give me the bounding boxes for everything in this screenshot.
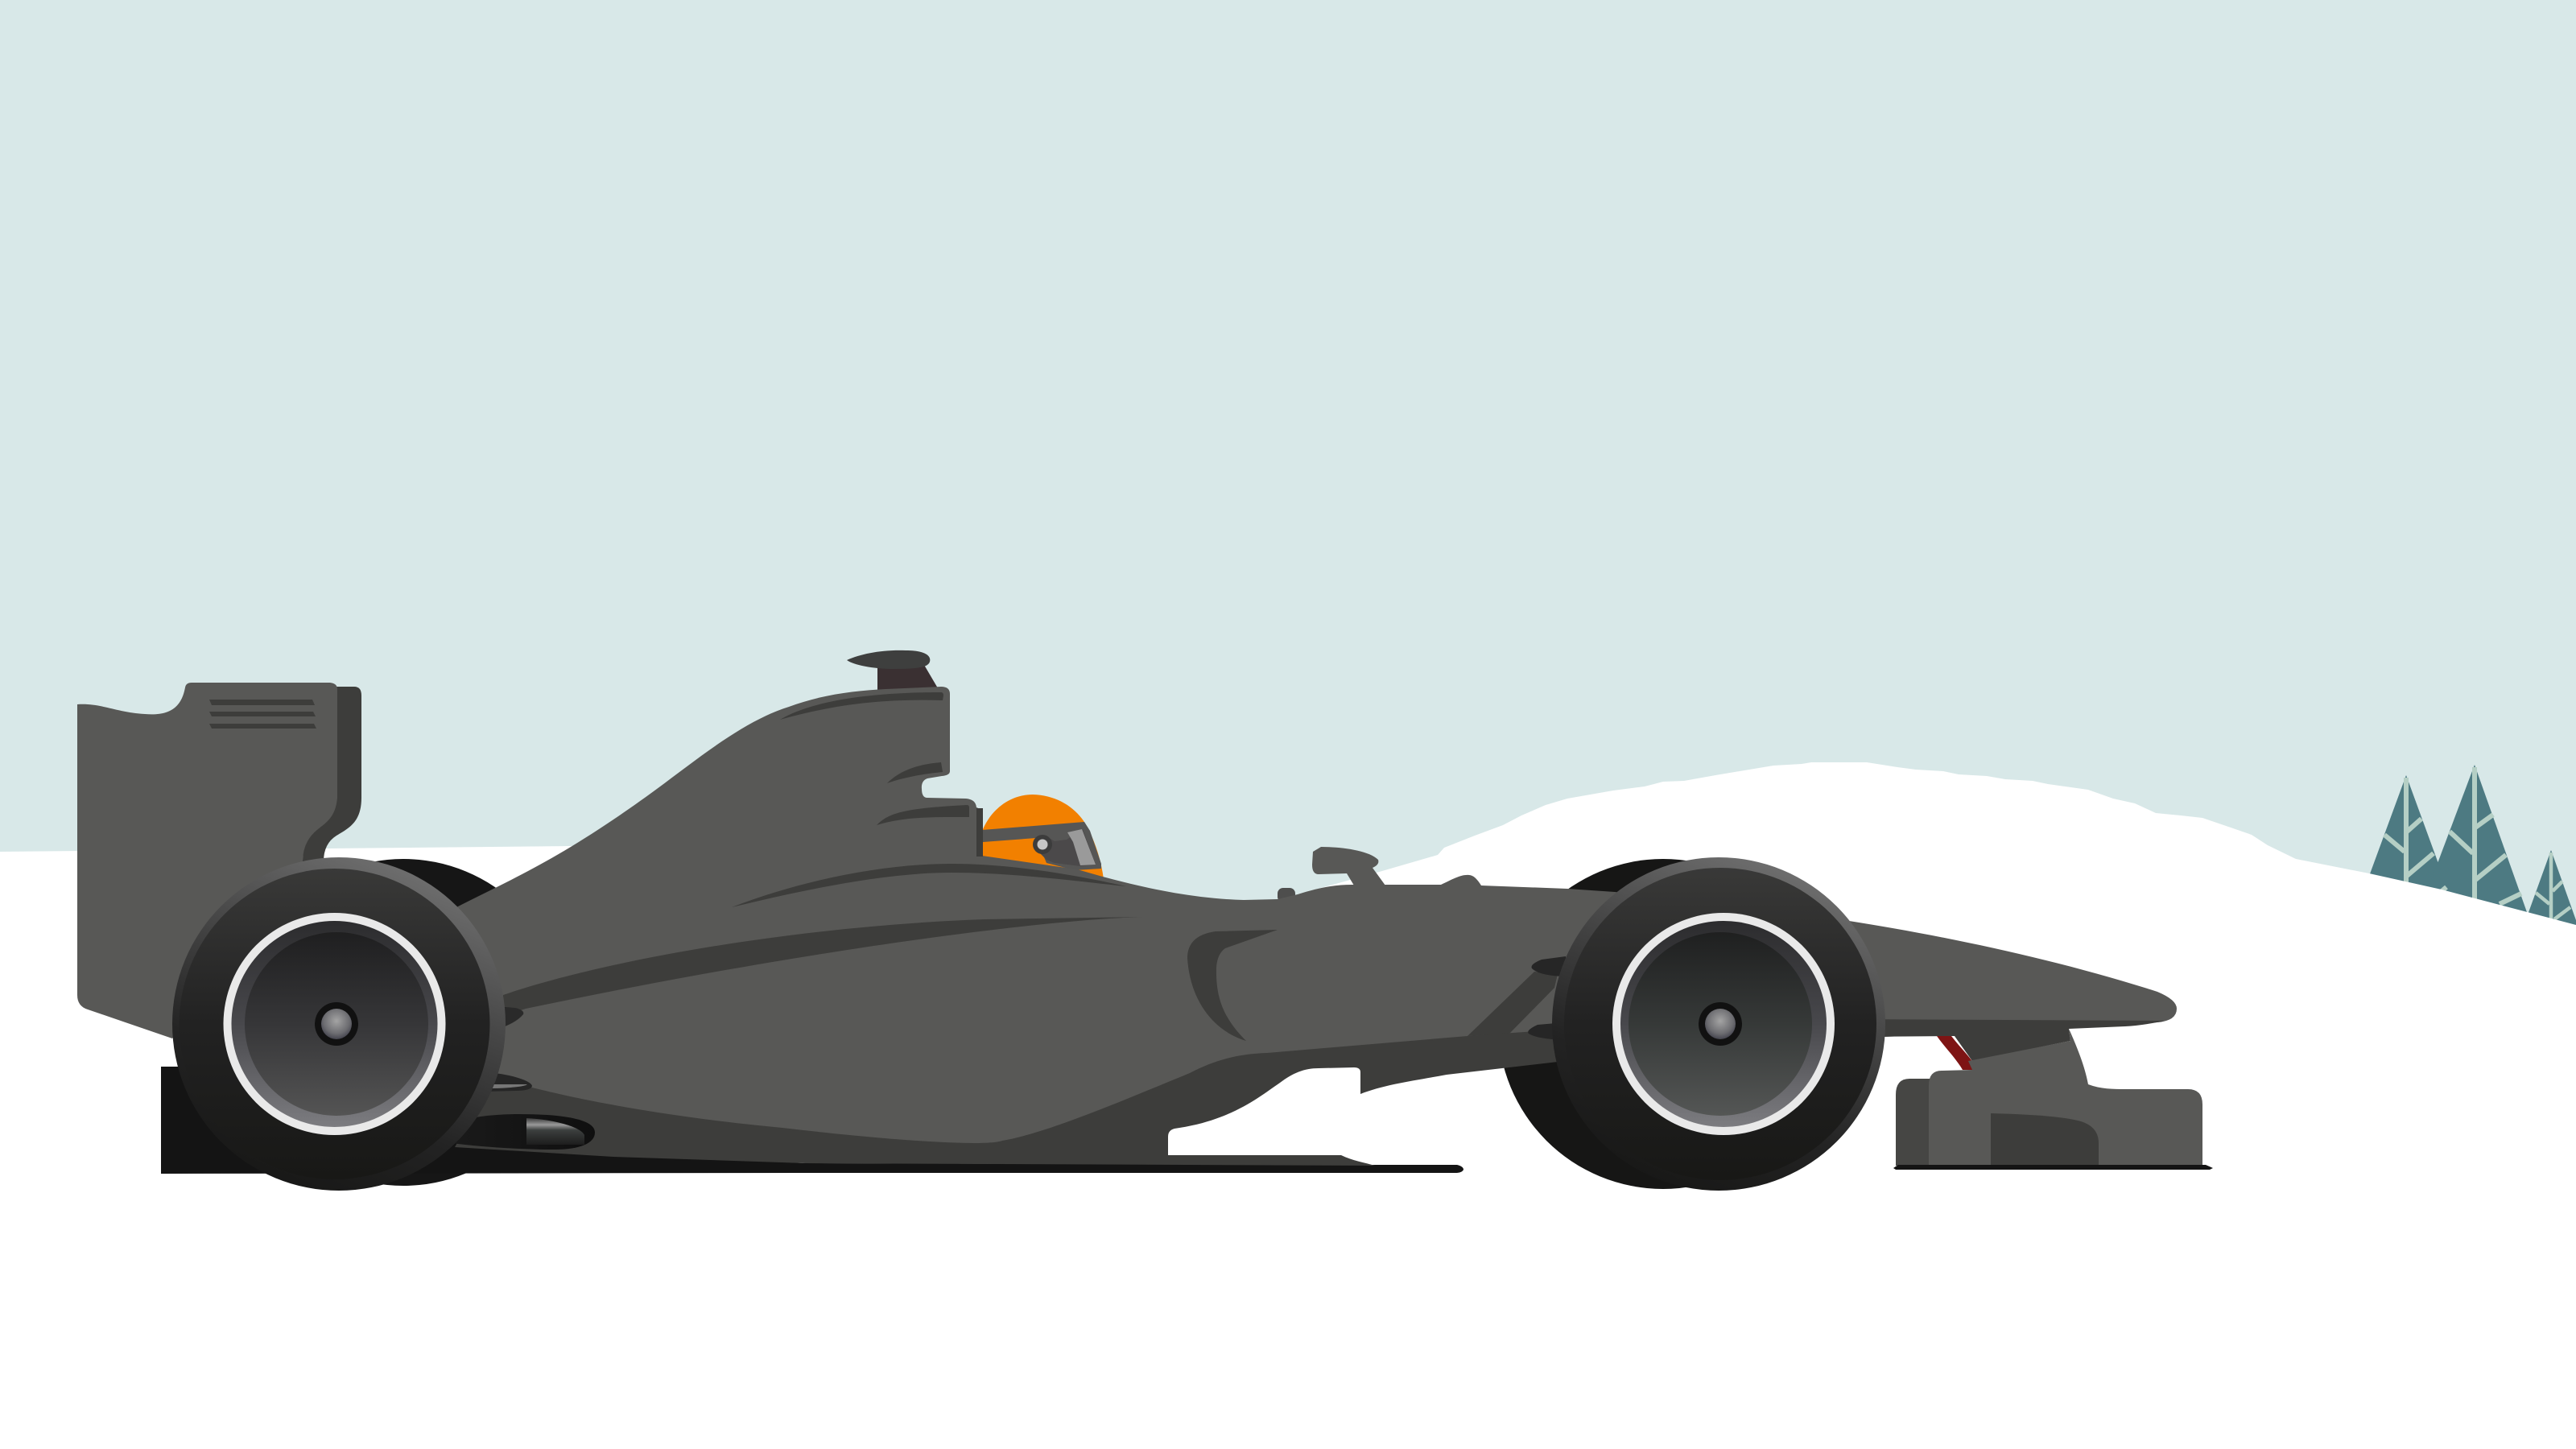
icon: pine trees	[2363, 765, 2576, 934]
front suspension pods	[1528, 956, 1566, 1040]
endplate dark rear strip	[303, 687, 361, 861]
front hub	[1699, 1002, 1742, 1046]
rear dish	[245, 932, 428, 1116]
wing black base	[1893, 1165, 2213, 1170]
endplate slots	[209, 700, 316, 729]
mirror	[1312, 847, 1385, 886]
visor	[1038, 829, 1096, 866]
front inner ring	[1620, 921, 1827, 1127]
wing left dark endplate	[1896, 1079, 1932, 1166]
rear diffuser and floor	[161, 1067, 1463, 1174]
front tyre sidewall	[1552, 857, 1885, 1191]
upper front pod	[1531, 956, 1566, 976]
car body	[451, 687, 2177, 1155]
engine cover streak	[780, 692, 943, 720]
front dish	[1629, 932, 1812, 1116]
front wheel	[1552, 857, 1885, 1191]
rear wheel far side	[240, 859, 567, 1186]
front tread	[1564, 868, 1876, 1180]
front suspension arms	[1468, 972, 1558, 1036]
helmet stripe	[982, 822, 1101, 870]
small antenna knob	[1278, 888, 1295, 902]
long side streak	[503, 917, 1144, 1016]
wing main shape	[1929, 1029, 2202, 1166]
cockpit rear edge	[976, 808, 983, 857]
rear suspension pods	[451, 1006, 595, 1150]
front white rim	[1612, 913, 1835, 1135]
upper rear pod	[495, 1006, 523, 1029]
helmet shell	[979, 795, 1104, 879]
exhaust chrome	[526, 1118, 584, 1145]
rear white rim	[224, 913, 446, 1135]
rear tyre sidewall	[172, 857, 506, 1191]
nose and front wing	[1852, 1019, 2213, 1170]
red brake duct strut	[1937, 1036, 1977, 1070]
front wheel far side	[1498, 859, 1828, 1189]
snow hill and ground	[0, 762, 2576, 1449]
endplate main panel	[77, 683, 337, 1038]
visor glass	[1067, 829, 1096, 865]
lower front pod	[1528, 1022, 1566, 1040]
body streaks	[503, 692, 1278, 1041]
rear tread	[179, 869, 489, 1179]
lower inlet streak	[877, 805, 969, 825]
exhaust pod	[451, 1114, 595, 1150]
sky background	[0, 0, 2576, 966]
middle rear pod	[483, 1072, 532, 1092]
sidepod top streak	[732, 864, 1126, 907]
intake pylon	[877, 665, 940, 692]
rear wheel	[172, 857, 506, 1191]
nose underside	[1852, 1019, 2165, 1061]
rear inner ring	[232, 921, 438, 1127]
rear wing endplate	[77, 683, 361, 1038]
intake cap	[847, 650, 930, 669]
lower body dark band	[455, 1030, 1558, 1166]
ear disc	[1033, 835, 1052, 854]
rear hub	[315, 1002, 358, 1046]
wing inner cascade	[1991, 1113, 2099, 1166]
upper inlet streak	[887, 762, 943, 783]
air intake	[847, 650, 940, 692]
driver helmet	[979, 795, 1104, 879]
sidepod inlet swoosh	[1187, 930, 1278, 1041]
